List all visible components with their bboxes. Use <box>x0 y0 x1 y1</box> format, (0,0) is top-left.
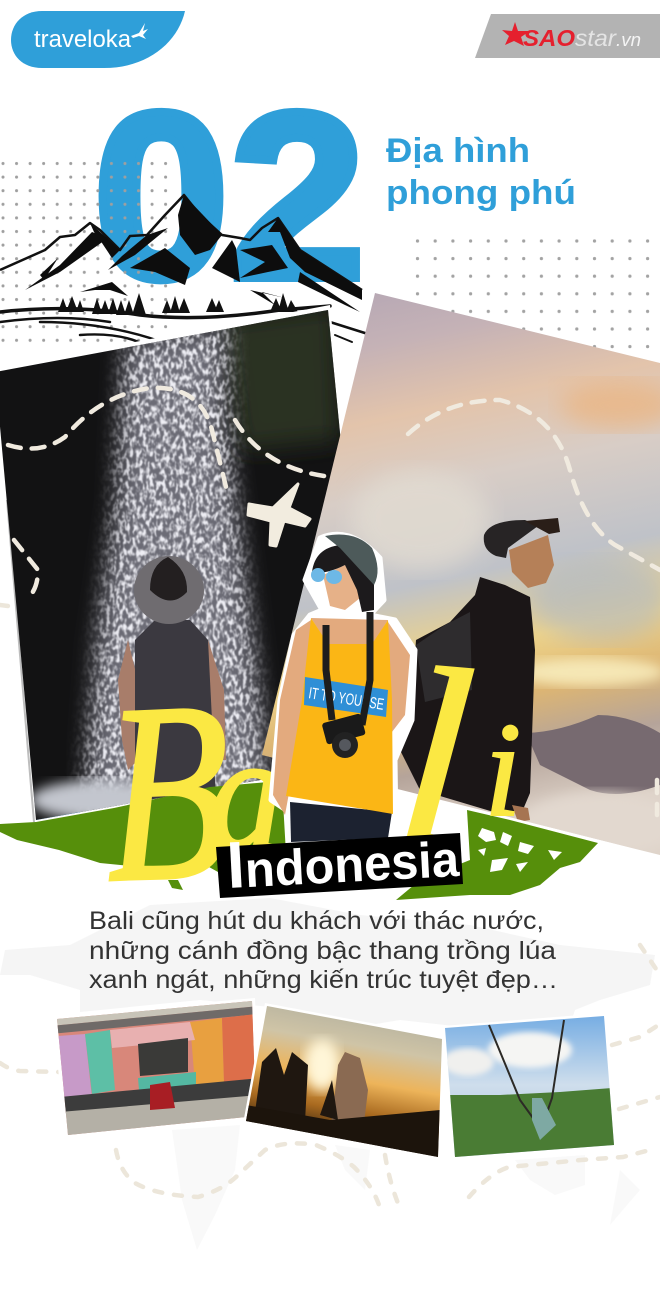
center traveler <box>271 534 415 845</box>
white splotches in brush <box>478 828 562 872</box>
photo: waterfall <box>0 305 340 822</box>
background: world map <box>0 898 655 1250</box>
body text: xanh ngát, những kiến trúc tuyệt đẹp… <box>89 966 558 994</box>
logo: Saostar: SAO <box>523 25 575 51</box>
photo: sunset man <box>262 293 660 857</box>
traveler head <box>311 534 378 612</box>
tank top blue band with slogan: IT TO YOURSE <box>307 685 385 714</box>
body text <box>89 907 558 994</box>
camera straps <box>326 612 370 725</box>
title script: Ba: B <box>102 648 233 935</box>
illustration: mountains <box>0 195 362 312</box>
waterfall person <box>118 556 226 800</box>
green brush stroke <box>0 780 598 900</box>
photo: jungle swing <box>445 1016 614 1157</box>
body text: Bali cũng hút du khách với thác nước, <box>89 907 544 935</box>
title band: Indonesia: Indonesia <box>225 816 462 902</box>
camera <box>322 713 366 758</box>
background: dot pattern left <box>0 160 170 350</box>
title script: Ba: a <box>208 699 284 887</box>
heading: phong phú <box>386 174 576 212</box>
heading: Địa hình <box>386 132 530 170</box>
traveler arms and chest <box>273 618 410 815</box>
sunset man silhouette <box>400 518 560 822</box>
logo: Saostar <box>475 14 660 58</box>
traveler shorts <box>290 802 392 842</box>
title script: li: i <box>484 696 522 845</box>
tank top blue band with slogan <box>304 677 388 717</box>
heading <box>386 132 576 212</box>
photo: graffiti wall <box>57 998 255 1135</box>
background: travel dashed routes <box>0 605 660 1208</box>
logo: Traveloka: traveloka <box>34 26 132 53</box>
title script: li: l <box>388 615 483 902</box>
route dashes over photos <box>8 388 660 815</box>
logo: Traveloka <box>11 11 185 68</box>
body text: những cánh đồng bậc thang trồng lúa <box>89 937 556 965</box>
logo: Saostar: star <box>575 25 617 51</box>
traveler tank top <box>286 618 393 814</box>
logo: Saostar: .vn <box>616 30 641 50</box>
illustration: trees and hills <box>0 293 368 345</box>
icon: airplane <box>248 484 310 546</box>
background: dot pattern right <box>414 238 660 358</box>
big number 02: 02 <box>93 63 366 329</box>
photo: sunset friends <box>244 1003 442 1157</box>
